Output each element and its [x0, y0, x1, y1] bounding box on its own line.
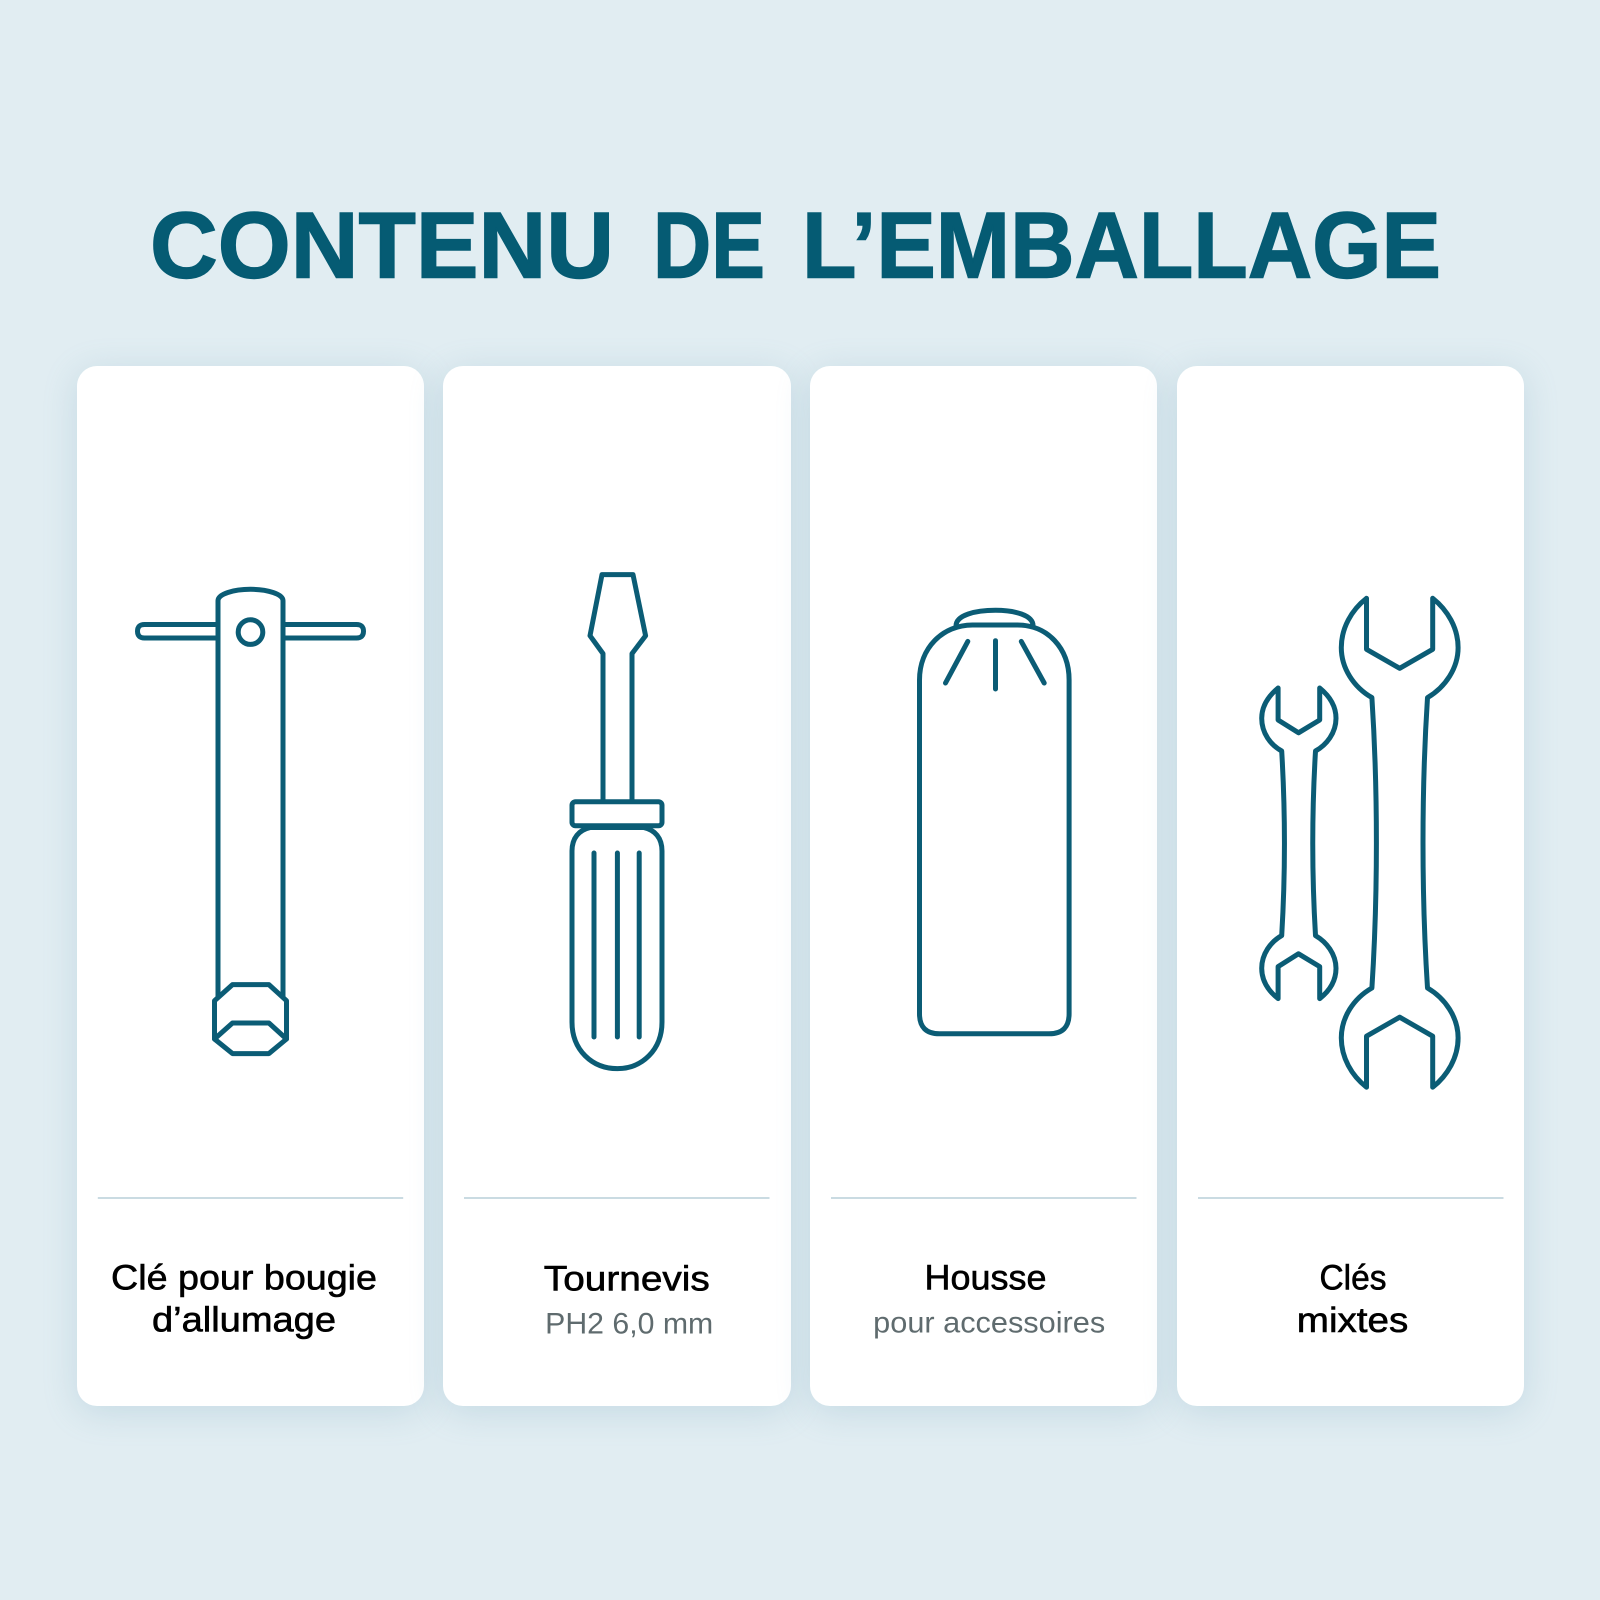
divider	[464, 1197, 770, 1199]
title	[151, 200, 1441, 290]
panel: housse	[810, 366, 1157, 1406]
panel: tournevis	[443, 366, 790, 1406]
label: clé pour bougie d'allumage: Clé pour bougie	[110, 1258, 376, 1297]
label: tournevis PH2 6,0 mm: Tournevis	[544, 1260, 710, 1299]
label: clés mixtes	[1296, 1258, 1408, 1340]
icon: small wrench	[1261, 688, 1336, 999]
label: tournevis PH2 6,0 mm	[544, 1260, 713, 1340]
label: clés mixtes: Clés	[1319, 1258, 1386, 1297]
divider	[830, 1197, 1136, 1199]
panel: clé pour bougie	[76, 366, 424, 1406]
icon: pouch	[919, 610, 1069, 1034]
label: clés mixtes: mixtes	[1296, 1301, 1408, 1340]
label: housse pour accessoires: pour accessoires	[873, 1307, 1105, 1340]
label: clé pour bougie d'allumage	[110, 1258, 376, 1340]
label: clé pour bougie d'allumage: d’allumage	[152, 1301, 336, 1340]
divider	[1198, 1197, 1503, 1199]
label: housse pour accessoires: Housse	[924, 1258, 1046, 1297]
icon: spark plug wrench	[137, 589, 363, 1054]
icon: large wrench	[1341, 598, 1458, 1087]
label: tournevis PH2 6,0 mm: PH2 6,0 mm	[545, 1307, 713, 1340]
label: housse pour accessoires	[873, 1258, 1105, 1340]
icon: screwdriver	[572, 575, 662, 1069]
panel: clés mixtes	[1176, 366, 1524, 1406]
divider	[97, 1197, 403, 1199]
